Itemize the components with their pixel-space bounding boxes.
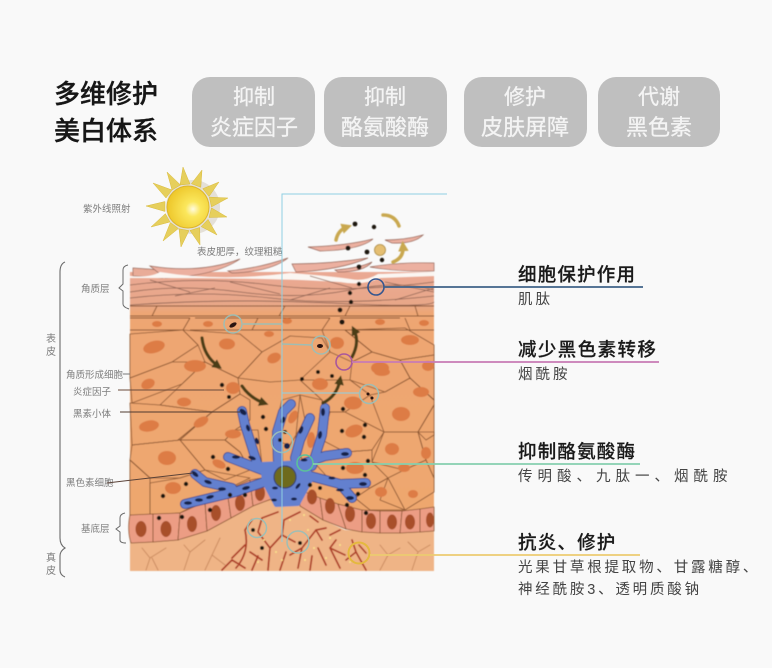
left side labels — [46, 283, 124, 577]
callout: 细胞保护作用 — [368, 264, 643, 308]
callout: 抗炎、修护: 抗炎、修护 — [518, 532, 617, 553]
panel: skin cross-section — [129, 215, 434, 571]
pill: 抑制炎症因子: 炎症因子 — [210, 115, 298, 140]
pill: 代谢黑色素 — [598, 77, 720, 147]
icon: sun — [146, 167, 228, 247]
pill: 抑制炎症因子 — [192, 77, 315, 147]
basal layer cells — [129, 477, 434, 543]
label: 表皮肥厚: 表皮肥厚，纹理粗糙 — [197, 246, 283, 258]
keratinocyte nuclei — [138, 318, 434, 498]
left side labels: 角质层 — [81, 283, 110, 295]
left side labels: 表 — [46, 332, 56, 345]
teal marker circles — [224, 315, 378, 553]
pill: 修护皮肤屏障: 皮肤屏障 — [481, 115, 569, 140]
title — [54, 79, 158, 146]
left side labels: 角质形成细胞 — [66, 369, 124, 381]
pill: 代谢黑色素: 代谢 — [638, 86, 680, 109]
callout: 抑制酪氨酸酶 — [297, 441, 732, 485]
label: 紫外线照射: 紫外线照射 — [83, 203, 131, 215]
tan arrows — [336, 215, 403, 262]
callout: 抑制酪氨酸酶: 传明酸、九肽一、烟酰胺 — [518, 468, 732, 485]
melanin dots — [157, 222, 384, 550]
cyan process line — [282, 194, 447, 542]
left side labels: 炎症因子 — [73, 386, 112, 398]
callout: 细胞保护作用: 细胞保护作用 — [518, 264, 636, 285]
melanosomes in dendrites — [184, 408, 367, 505]
left side labels: 皮 — [46, 345, 56, 358]
pill: 修护皮肤屏障 — [464, 77, 587, 147]
dermis capillaries — [222, 512, 366, 570]
callout: 减少黑色素转移: 烟酰胺 — [518, 366, 570, 383]
white gap — [130, 272, 434, 283]
dermis yellow dots — [257, 514, 351, 563]
left side labels: 基底层 — [81, 523, 110, 535]
callout: 细胞保护作用: 肌肽 — [518, 291, 553, 308]
pill: 抑制酪氨酸酶: 抑制 — [364, 86, 406, 109]
callout: 抗炎、修护: 光果甘草根提取物、甘露糖醇、 — [518, 559, 760, 576]
melanocyte — [185, 404, 366, 505]
dermis base — [130, 500, 434, 571]
brick rows — [130, 306, 434, 330]
stratum corneum flakes — [133, 235, 434, 278]
basal nuclei — [136, 485, 434, 537]
leader lines and braces — [60, 262, 240, 577]
left side labels: 黑素小体 — [73, 408, 112, 420]
pill: 代谢黑色素: 黑色素 — [626, 115, 692, 140]
callout: 减少黑色素转移: 减少黑色素转移 — [518, 339, 657, 360]
corneum lines — [130, 276, 434, 305]
title: 多维修护 — [54, 79, 158, 109]
pill: 抑制酪氨酸酶 — [324, 77, 447, 147]
tan pigment particle — [374, 244, 386, 256]
pill: 抑制酪氨酸酶: 酪氨酸酶 — [341, 115, 429, 140]
melanocyte nucleus — [274, 466, 296, 488]
callout: 减少黑色素转移 — [336, 339, 659, 383]
pill: 修护皮肤屏障: 修护 — [504, 86, 546, 109]
left side labels: 黑色素细胞 — [66, 477, 114, 489]
keratinocyte cell mesh — [130, 328, 434, 515]
left side labels: 真 — [46, 551, 56, 564]
callout: 抑制酪氨酸酶: 抑制酪氨酸酶 — [518, 441, 636, 462]
marker contents — [229, 321, 374, 400]
dark arrows — [202, 330, 357, 403]
left side labels: 皮 — [46, 564, 56, 577]
callout: 抗炎、修护: 神经酰胺3、透明质酸钠 — [518, 581, 702, 598]
skin base — [130, 272, 434, 520]
title: 美白体系 — [54, 116, 158, 146]
pill: 抑制炎症因子: 抑制 — [233, 86, 275, 109]
callout: 抗炎、修护 — [348, 532, 760, 598]
